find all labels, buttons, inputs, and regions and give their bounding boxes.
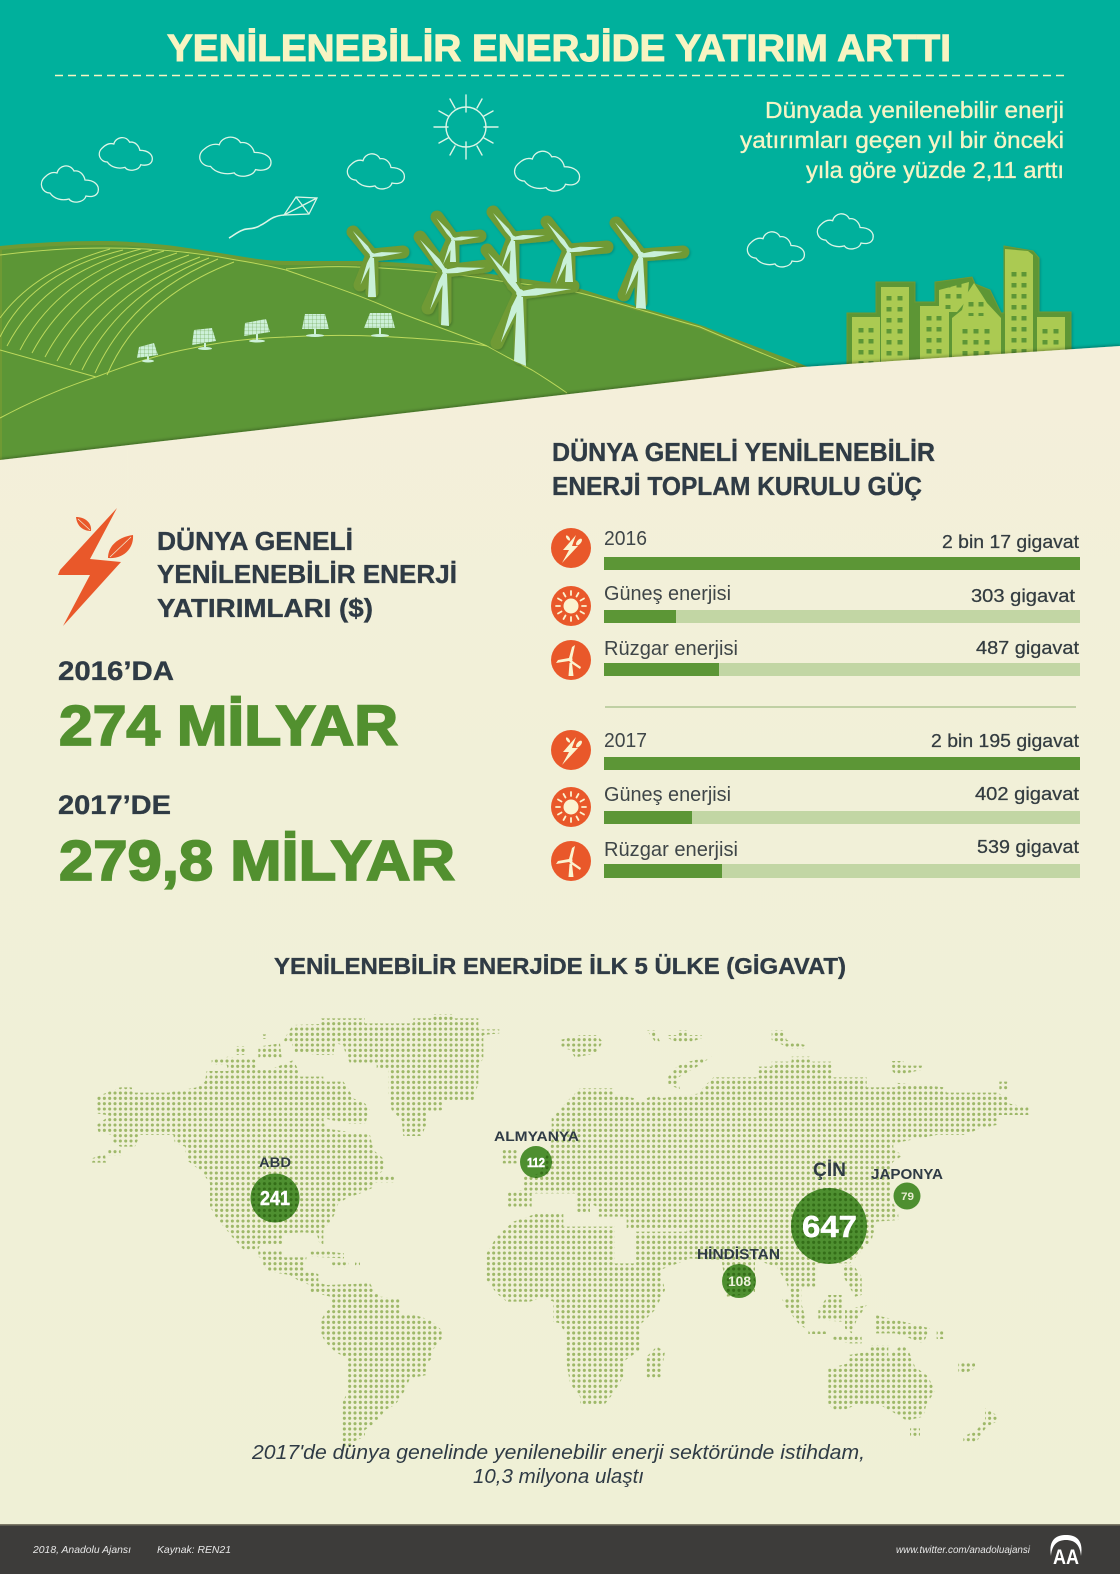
- footer: www.twitter.com/anadoluajansi: [896, 1544, 1031, 1556]
- China label: ÇİN: [813, 1160, 846, 1181]
- bar chart: 2017: Rüzgar enerjisi: [604, 839, 738, 861]
- 2017 investment: 279,8 MİLYAR: [59, 829, 455, 893]
- bar chart: 2017: 2017: [604, 730, 647, 752]
- caption: 10,3 milyona ulaştı: [473, 1466, 644, 1488]
- capacity heading: DÜNYA GENELİ YENİLENEBİLİR: [552, 438, 935, 467]
- 2016 investment: 2016’DA: [58, 656, 174, 686]
- title: YENİLENEBİLİR ENERJİDE YATIRIM ARTTI: [167, 28, 951, 70]
- bar chart: 2016: Güneş enerjisi: [604, 583, 731, 605]
- India label: HİNDİSTAN: [697, 1246, 780, 1263]
- bar chart: 2017: Güneş enerjisi: [604, 784, 731, 806]
- investment heading: [157, 526, 457, 623]
- USA label: ABD: [259, 1154, 291, 1170]
- USA label: 241: [260, 1188, 290, 1210]
- 2017 investment: [58, 790, 455, 893]
- 2016 investment: [58, 656, 398, 758]
- panel: investment: [58, 508, 457, 893]
- bar chart: 2017: 2 bin 195 gigavat: [931, 730, 1079, 751]
- Japan label: JAPONYA: [871, 1166, 943, 1183]
- wind turbines: [353, 213, 683, 366]
- China label: [802, 1160, 857, 1244]
- subtitle: yıla göre yüzde 2,11 arttı: [806, 157, 1064, 183]
- paper background: [0, 346, 1120, 1574]
- bar chart: 2016: 487 gigavat: [976, 637, 1079, 658]
- bar chart: 2017: 539 gigavat: [977, 836, 1079, 857]
- Germany label: ALMYANYA: [494, 1128, 579, 1144]
- subtitle: [740, 97, 1064, 183]
- investment heading: YENİLENEBİLİR ENERJİ: [157, 559, 457, 589]
- bar chart: 2016: 2016: [604, 528, 647, 550]
- caption: [251, 1442, 865, 1488]
- 2017 investment: 2017’DE: [58, 790, 171, 820]
- subtitle: Dünyada yenilenebilir enerji: [765, 97, 1064, 123]
- value circles: [250, 1146, 920, 1298]
- China label: 647: [802, 1209, 857, 1244]
- Japan label: 79: [901, 1191, 914, 1203]
- icon: agency logo: [1050, 1535, 1082, 1569]
- India label: [697, 1246, 780, 1289]
- bar chart: 2016: 303 gigavat: [971, 585, 1075, 606]
- city skyline: [847, 246, 1071, 375]
- investment heading: DÜNYA GENELİ: [157, 526, 353, 556]
- bar chart: 2016: 2 bin 17 gigavat: [942, 531, 1079, 552]
- investment heading: YATIRIMLARI ($): [157, 593, 373, 623]
- icon: sun: [434, 95, 498, 159]
- bar chart: 2016: Rüzgar enerjisi: [604, 638, 738, 660]
- footer: Kaynak: REN21: [157, 1544, 231, 1556]
- 2016 investment: 274 MİLYAR: [59, 694, 398, 758]
- icon: agency logo: AA: [1053, 1546, 1079, 1569]
- bar chart: 2017: 402 gigavat: [975, 783, 1079, 804]
- solar panels: [137, 313, 395, 362]
- bar chart: 2017: [551, 730, 1080, 881]
- India label: 108: [728, 1273, 751, 1289]
- USA label: [259, 1154, 291, 1210]
- icon: bolt with leaves: [58, 508, 133, 626]
- panel: installed capacity: [551, 438, 1080, 881]
- capacity heading: ENERJİ TOPLAM KURULU GÜÇ: [552, 472, 922, 501]
- Germany label: 112: [527, 1155, 545, 1170]
- footer: 2018, Anadolu Ajansı: [32, 1544, 131, 1556]
- caption: 2017'de dünya genelinde yenilenebilir enerji sektöründe istihdam,: [251, 1442, 865, 1464]
- capacity heading: [552, 438, 935, 501]
- country labels: [259, 1128, 943, 1289]
- clouds: [41, 137, 873, 267]
- world dot map: [94, 1008, 1031, 1445]
- header sky background: [0, 0, 1120, 470]
- hills: [0, 243, 803, 470]
- footer: [0, 1524, 1120, 1574]
- Japan label: [871, 1166, 943, 1203]
- icon: kite: [229, 197, 317, 238]
- bar chart: 2016: [551, 528, 1080, 680]
- Germany label: [494, 1128, 579, 1170]
- turbine halos: [353, 212, 683, 358]
- map heading: YENİLENEBİLİR ENERJİDE İLK 5 ÜLKE (GİGAVAT): [274, 953, 846, 979]
- subtitle: yatırımları geçen yıl bir önceki: [740, 127, 1064, 153]
